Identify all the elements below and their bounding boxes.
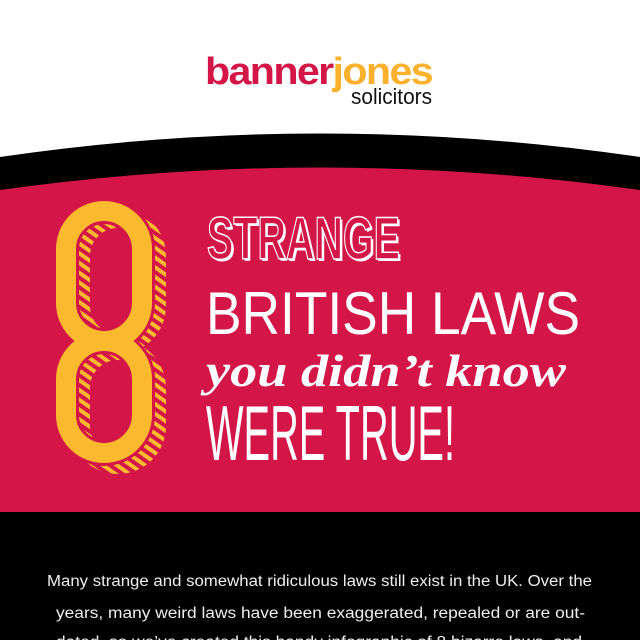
logo: solicitors (351, 84, 432, 109)
big number 8 (66, 211, 156, 464)
title text: you didn’t know (200, 345, 566, 396)
logo (205, 51, 432, 109)
logo: banner jones (205, 51, 432, 93)
intro text: Many strange and somewhat ridiculous laws still exist in the UK. Over the (47, 573, 592, 590)
background black arc band (0, 134, 640, 640)
red hero panel (0, 168, 640, 512)
title text: STRANGE (209, 207, 402, 274)
title text: BRITISH LAWS (206, 280, 580, 347)
intro text: years, many weird laws have been exaggerated, repealed or are out- (56, 605, 585, 622)
title text: STRANGE (207, 205, 400, 272)
title text (200, 205, 580, 477)
intro text (47, 573, 592, 640)
